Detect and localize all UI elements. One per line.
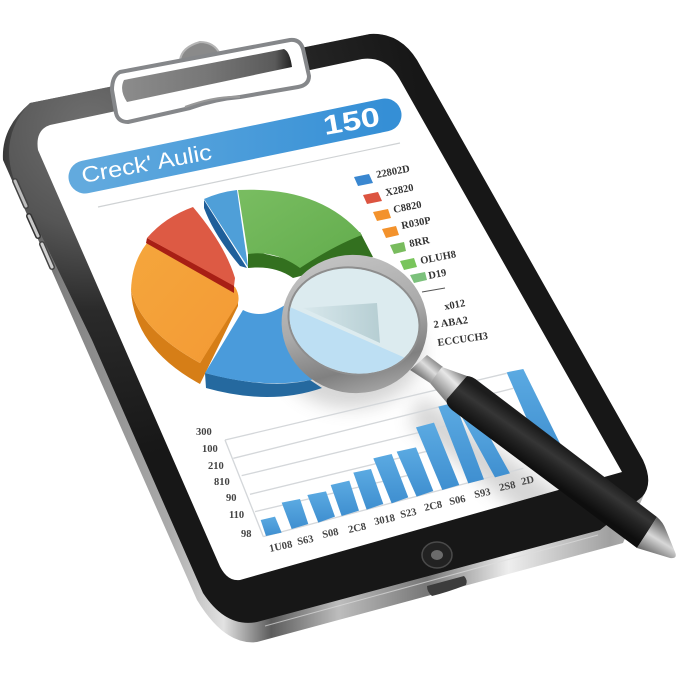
- slice: large blue: [205, 305, 340, 397]
- magnifier collar: [430, 367, 467, 403]
- y axis labels: [196, 427, 252, 540]
- x axis labels: S08: [321, 527, 340, 541]
- magnifier handle: [447, 376, 657, 548]
- x axis labels: 3018: [373, 513, 396, 528]
- legend row 4: [382, 215, 432, 238]
- magnifier shadow: [283, 338, 558, 506]
- screen: [38, 59, 622, 580]
- legend note 1: x012: [443, 298, 466, 313]
- slice: green: [238, 190, 373, 278]
- y axis labels: 300: [196, 427, 212, 438]
- clipboard clip: [112, 40, 309, 122]
- x axis labels: S63: [296, 534, 315, 548]
- legend: [354, 164, 489, 349]
- clip knob: [180, 42, 220, 60]
- legend row 4: R030P: [400, 215, 432, 232]
- x axis labels: 1U08: [268, 539, 293, 555]
- chart grid: [225, 373, 523, 537]
- x axis labels: S93: [473, 487, 492, 501]
- magnifier lens: [290, 268, 418, 374]
- bar chart: [196, 369, 563, 555]
- header number: 150: [321, 101, 382, 141]
- magnifier tip: [637, 517, 676, 558]
- header title: Creck' Aulic: [79, 139, 214, 188]
- home button: [422, 542, 452, 568]
- legend row 7: D19: [427, 268, 447, 282]
- y axis labels: 810: [214, 477, 230, 488]
- x axis labels: 2C8: [347, 521, 367, 536]
- x axis labels: 2D: [520, 474, 536, 488]
- y axis labels: 100: [202, 444, 218, 455]
- legend row 3: C8820: [392, 200, 423, 216]
- legend row 2: X2820: [384, 183, 415, 199]
- x axis labels: 2C8: [423, 499, 443, 514]
- legend note 2: 2 ABA2: [433, 315, 469, 331]
- legend row 7: [410, 268, 447, 283]
- bottom edge highlight: [265, 535, 598, 626]
- header pill: [79, 115, 385, 188]
- x axis labels: S23: [399, 507, 418, 521]
- x axis labels: 2S8: [498, 480, 517, 494]
- legend row 1: 22802D: [375, 164, 411, 181]
- legend row 5: 8RR: [408, 235, 431, 250]
- y axis labels: 110: [229, 510, 244, 521]
- magnifying glass: [271, 243, 676, 558]
- y axis labels: 98: [241, 529, 252, 540]
- legend row 6: [400, 249, 457, 270]
- charging port: [427, 576, 467, 596]
- slice: small blue: [204, 190, 248, 268]
- legend row 6: OLUH8: [419, 249, 457, 267]
- magnifier neck: [410, 355, 443, 383]
- legend row 5: [390, 235, 431, 254]
- slice: orange: [131, 243, 239, 384]
- x axis labels: S06: [448, 494, 467, 508]
- chart bars: [261, 369, 563, 536]
- legend note 3: ECCUCH3: [437, 331, 489, 349]
- legend row 2: [363, 183, 415, 204]
- slice: red: [146, 207, 235, 293]
- donut chart: [131, 190, 373, 397]
- side buttons: [15, 181, 52, 267]
- y axis labels: 90: [226, 493, 236, 504]
- legend row 1: [354, 164, 411, 186]
- magnifier ring: [271, 243, 438, 405]
- clip metal band: [112, 40, 309, 122]
- y axis labels: 210: [208, 461, 224, 472]
- clip inner shade: [122, 49, 292, 102]
- x axis labels: [268, 474, 536, 555]
- legend row 3: [373, 200, 423, 221]
